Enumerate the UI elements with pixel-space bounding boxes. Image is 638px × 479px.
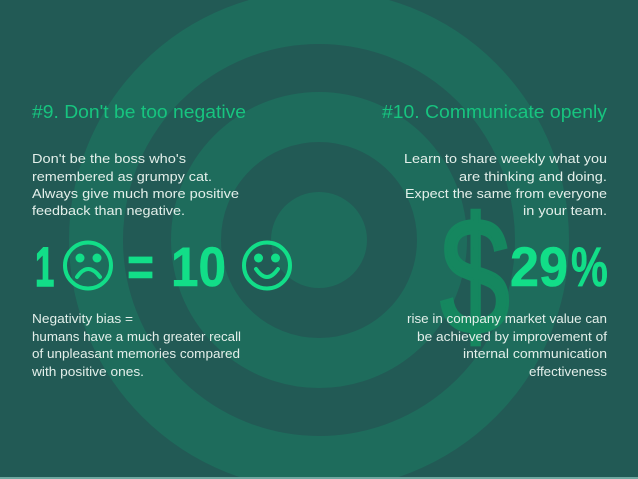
concentric target rings [96, 17, 542, 463]
equation: one sad equals ten happy [35, 235, 290, 298]
heading: tip 10: #10. Communicate openly [382, 101, 608, 122]
icon: dollar sign: $ [440, 184, 510, 369]
panel: tip 9 [31, 101, 290, 379]
text block: tip 9 intro [32, 151, 239, 218]
text block: stat description: effectiveness [529, 364, 608, 379]
stat: 29 percent: 29 [510, 235, 568, 298]
text block: tip 10 intro: in your team. [523, 203, 607, 218]
heading: tip 9: #9. Don't be too negative [32, 101, 246, 122]
text block: stat description: rise in company market value can [407, 311, 607, 326]
text block: tip 10 intro: are thinking and doing. [459, 169, 607, 184]
text block: tip 10 intro [404, 151, 607, 218]
panel: tip 10 [382, 101, 608, 379]
text block: negativity bias: with positive ones. [31, 364, 144, 379]
text block: negativity bias: of unpleasant memories compared [32, 346, 240, 361]
text block: negativity bias: Negativity bias = [32, 311, 133, 326]
text block: negativity bias: humans have a much greater recall [32, 329, 241, 344]
text block: stat description: internal communication [463, 346, 607, 361]
stat: 29 percent [510, 235, 608, 299]
text block: tip 9 intro: remembered as grumpy cat. [32, 169, 212, 184]
text block: tip 9 intro: Don't be the boss who's [32, 151, 187, 166]
text block: tip 9 intro: Always give much more positive [32, 186, 239, 201]
icon: sad face [65, 242, 111, 288]
text block: tip 10 intro: Expect the same from everyone [405, 186, 607, 201]
text block: negativity bias [31, 311, 241, 379]
equation: one sad equals ten happy: 1 [35, 236, 54, 298]
equation: one sad equals ten happy: = [127, 235, 154, 298]
text block: stat description: be achieved by improvement of [417, 329, 607, 344]
bottom edge line [0, 477, 638, 479]
stat: 29 percent: % [571, 236, 608, 299]
icon: happy face [244, 242, 290, 288]
text block: tip 10 intro: Learn to share weekly what you [404, 151, 607, 166]
text block: stat description [407, 311, 608, 379]
text block: tip 9 intro: feedback than negative. [32, 203, 185, 218]
equation: one sad equals ten happy: 10 [171, 235, 226, 298]
